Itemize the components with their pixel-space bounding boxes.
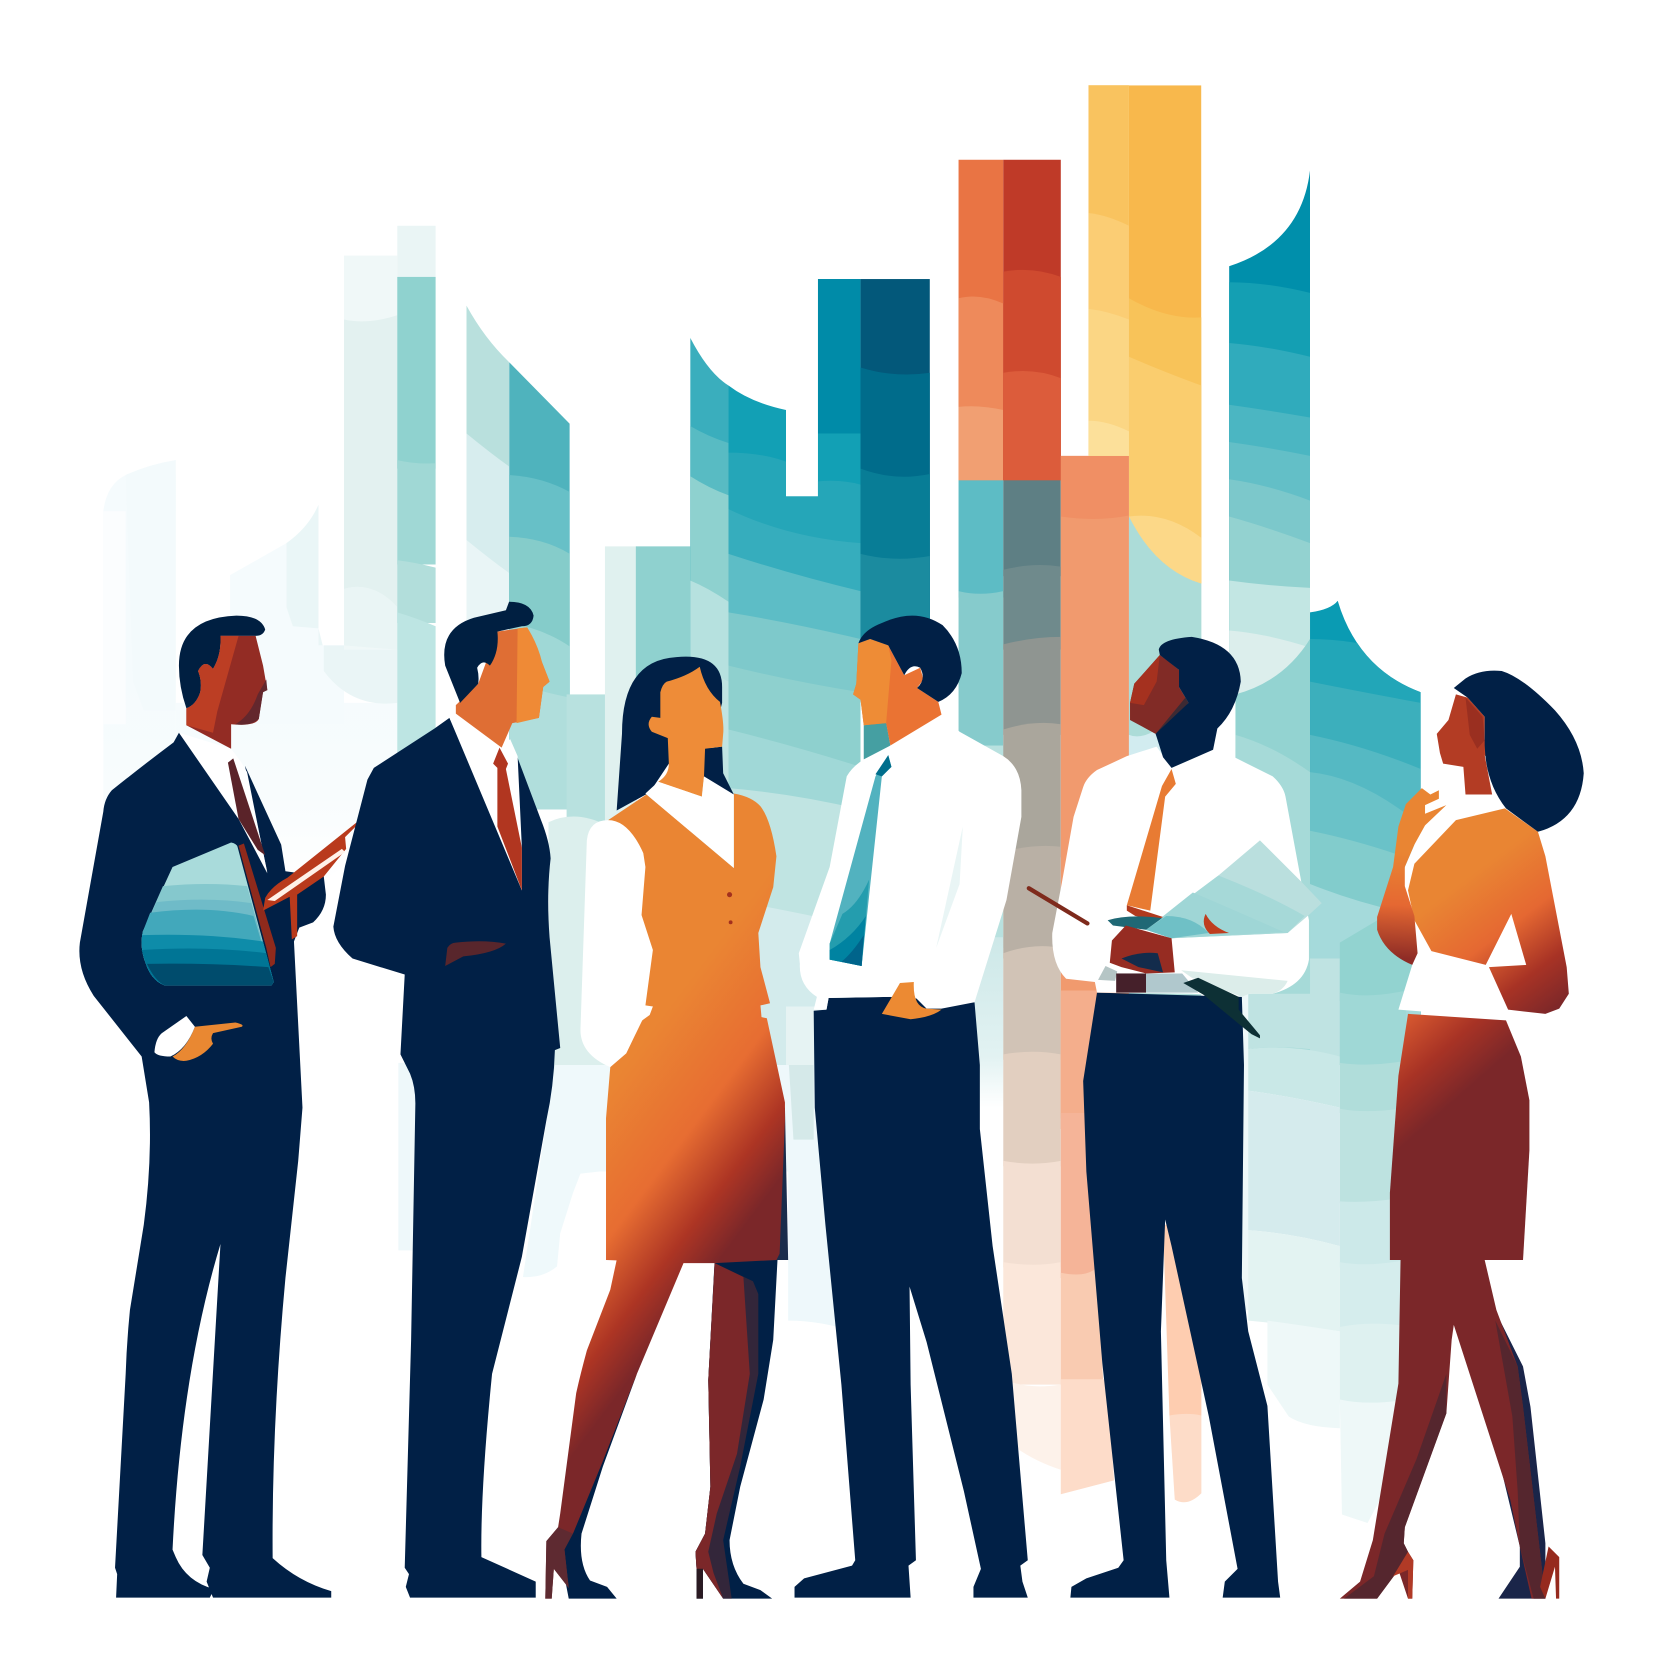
white collar — [645, 776, 734, 868]
orange top — [1408, 808, 1569, 1014]
shirt fold — [936, 826, 963, 948]
bar: teal column 373 — [397, 226, 436, 767]
bar: tall teal column 684-808 — [728, 279, 861, 1078]
orange tie — [1127, 769, 1176, 911]
face — [853, 639, 942, 746]
face shadow — [1466, 698, 1485, 749]
hand in pocket — [882, 982, 942, 1019]
back leg navy underlay — [695, 1260, 777, 1599]
leg navy edge — [1491, 1307, 1545, 1599]
dress back shadow — [772, 1108, 788, 1260]
clip tool at waist — [1183, 978, 1260, 1038]
bar: curved pale column 216 — [176, 505, 397, 884]
figure: man with tablet and orange tie — [1029, 637, 1322, 1598]
white shirt — [799, 715, 1021, 1010]
hand — [1110, 926, 1175, 973]
dress — [606, 793, 785, 1263]
front leg — [545, 1260, 685, 1599]
figure: man in white shirt with teal tie — [795, 616, 1028, 1598]
suit and trousers — [79, 733, 331, 1598]
hair — [858, 616, 962, 702]
teal neck shadow — [864, 722, 890, 759]
face lit side — [1130, 655, 1160, 705]
pocket — [445, 941, 506, 966]
figure: woman in orange dress — [545, 657, 788, 1599]
bar: curved teal column 1230 — [1310, 596, 1421, 1076]
figure: man in navy suit with red tie — [333, 602, 560, 1598]
bar: yellow column right — [1129, 85, 1201, 586]
tablet in hand — [263, 819, 360, 939]
bar: curved column 438 — [466, 298, 509, 650]
bar: teal column 1154 — [1229, 170, 1310, 703]
face and neck — [1437, 694, 1497, 795]
figure: woman in orange top and red skirt — [1340, 671, 1584, 1599]
shirt collar — [179, 733, 267, 873]
pen on tablet — [1108, 916, 1162, 930]
fingers — [1204, 914, 1229, 934]
face lit side — [853, 639, 891, 725]
legs — [1340, 1260, 1545, 1599]
bar: yellow column left — [1088, 85, 1129, 456]
white blouse — [1398, 795, 1508, 1018]
right shoe — [1540, 1546, 1559, 1599]
bar: pale lower column 1172 — [1241, 994, 1340, 1428]
bar: peach lower column — [1163, 1225, 1201, 1502]
teal tie — [830, 755, 891, 966]
back shoe heel — [697, 1569, 703, 1599]
thumb — [1127, 905, 1163, 920]
back leg mid shadow — [695, 1263, 758, 1599]
waist detail — [1098, 966, 1198, 993]
leg inner shadow — [1344, 1321, 1545, 1599]
head: face — [186, 636, 267, 749]
head: face — [456, 627, 550, 748]
bar: pale teal under yellow — [1129, 517, 1201, 1065]
back leg — [695, 1263, 750, 1599]
hand shadow — [1121, 953, 1163, 972]
figure: man in navy suit with folder — [79, 616, 360, 1598]
shirt collar — [449, 718, 522, 890]
red tie — [493, 748, 522, 890]
tablet — [1146, 840, 1322, 938]
bar: coral column — [1061, 456, 1129, 1494]
buttons — [727, 892, 733, 924]
red strap — [239, 844, 276, 967]
bar: curved column 648 — [690, 338, 728, 864]
bar: curved column 478 — [509, 362, 570, 820]
suit and trousers — [333, 718, 560, 1598]
bar: dark teal column 808 — [861, 279, 930, 639]
left shoe — [1393, 1552, 1413, 1599]
bar: pale column 323 — [344, 256, 397, 650]
pen — [1029, 888, 1087, 923]
ear — [1485, 730, 1497, 756]
head: face lit side — [186, 636, 239, 733]
front shoe — [545, 1527, 573, 1599]
bar: teal fade column 900 — [959, 480, 1003, 1108]
head: beard shadow — [235, 680, 267, 725]
white shirt — [1052, 747, 1309, 997]
bar: far-left pale column — [103, 460, 176, 884]
head: face lit side — [517, 627, 550, 723]
bar: grey to peach fade column — [1003, 480, 1061, 1470]
jaw shadow — [1156, 698, 1189, 734]
bar: pale lower column 1258 — [1340, 916, 1421, 1523]
front leg shadow — [558, 1374, 637, 1599]
trousers — [795, 997, 1028, 1598]
bar: pale column behind dress — [746, 1001, 852, 1331]
hair — [1454, 671, 1584, 832]
folder with striped bands — [142, 842, 274, 985]
hair back — [617, 657, 734, 811]
head: hair — [179, 616, 265, 708]
background bars — [103, 85, 1421, 1523]
bar: step column 535 — [398, 546, 788, 1277]
sleeve shadow — [1181, 970, 1288, 997]
face and neck — [649, 667, 723, 797]
hair and neck — [1156, 637, 1241, 768]
tie — [228, 758, 265, 855]
skirt — [1390, 1014, 1529, 1260]
hand with white cuff — [154, 1016, 243, 1061]
bar: teal lower column 1160 — [1235, 639, 1310, 1065]
head: hair — [444, 602, 534, 703]
trousers — [1070, 993, 1280, 1598]
white sleeve — [580, 820, 653, 1067]
hand and arm — [1377, 788, 1446, 965]
bar: orange and red column — [959, 160, 1061, 480]
face — [1130, 655, 1189, 734]
